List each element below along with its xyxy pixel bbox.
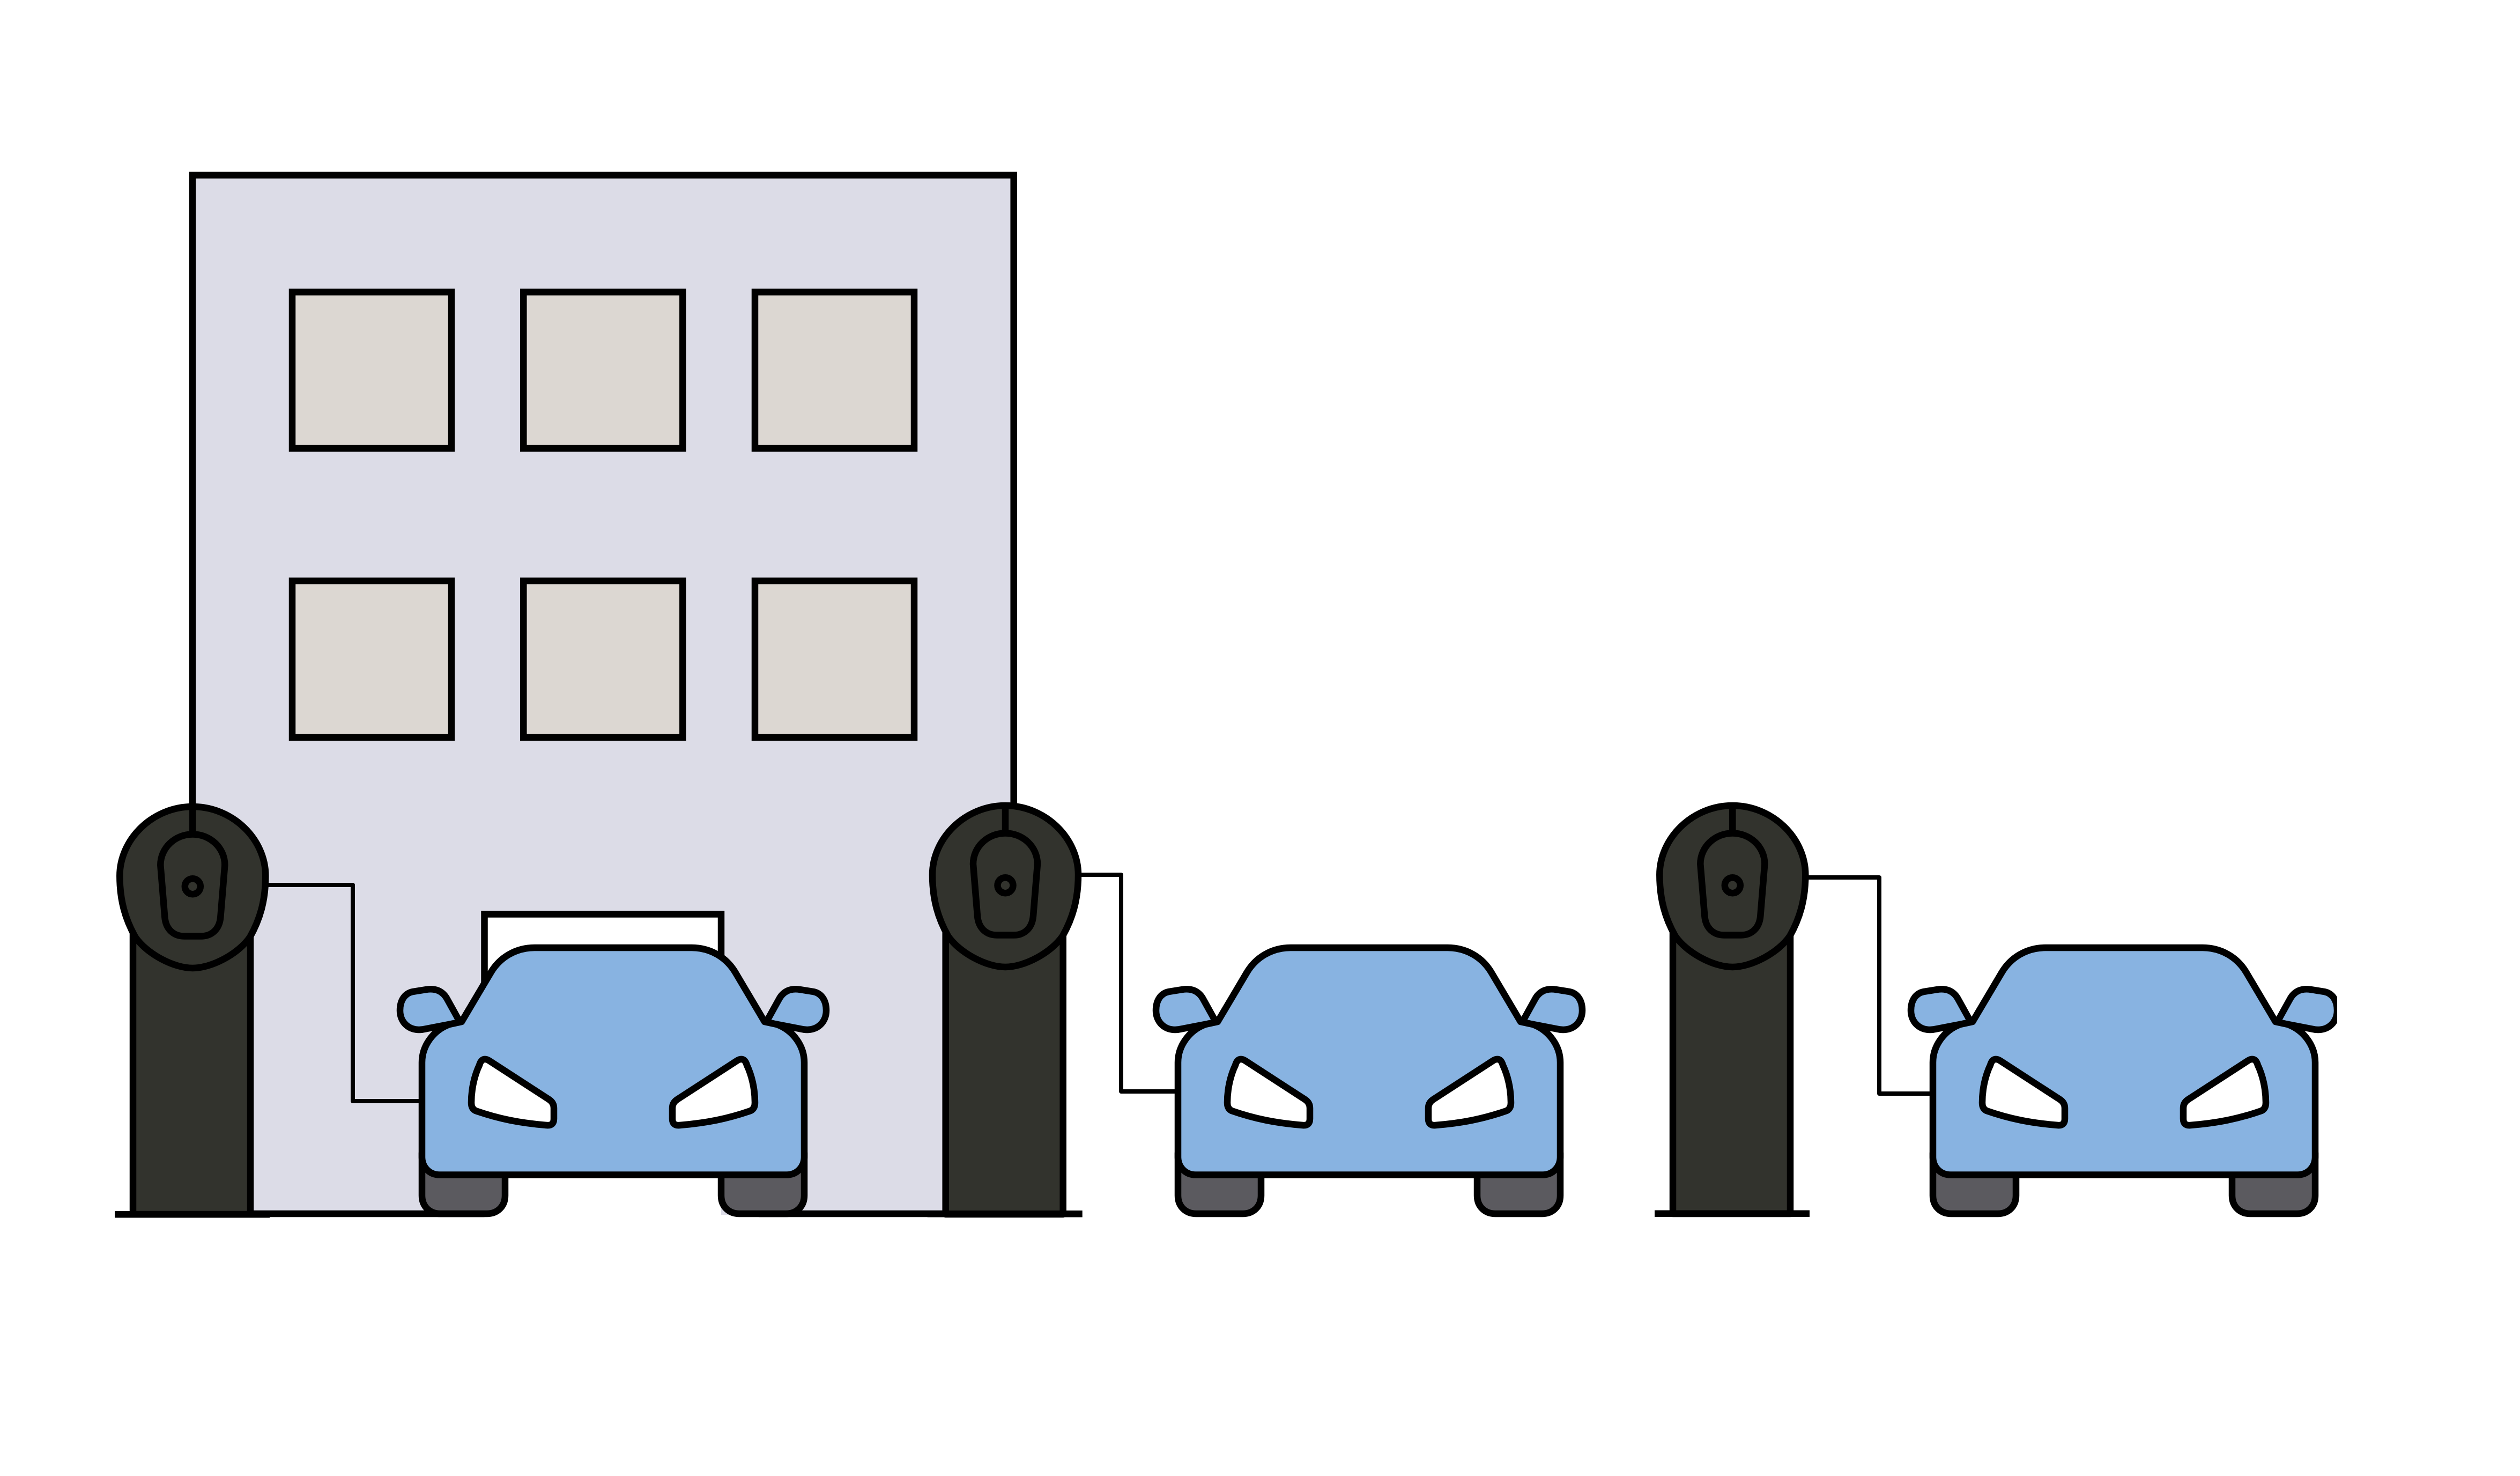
window: top left (292, 292, 451, 448)
building (192, 175, 1014, 1221)
charger 2 (928, 806, 1083, 1217)
car 3 (1911, 948, 2337, 1214)
car 2 left headlight (1227, 1059, 1310, 1125)
building door (485, 914, 759, 1221)
window: bottom middle (523, 581, 683, 737)
car 3 right headlight (2183, 1059, 2266, 1125)
car 1 right mirror (766, 989, 826, 1030)
windows (292, 292, 914, 737)
window: top right (755, 292, 914, 448)
charger 2 head (932, 806, 1078, 967)
charger 1 (115, 807, 270, 1217)
charging cable 2 (1079, 875, 1180, 1091)
car 1 body (422, 948, 804, 1175)
car 3 right wheel (2232, 1153, 2315, 1214)
charger 1 head (120, 807, 265, 968)
car 3 left mirror (1911, 989, 1971, 1030)
car 2 body (1178, 948, 1560, 1175)
charger 1 post (133, 932, 250, 1214)
charger 3 stem (1729, 806, 1736, 833)
window: top middle (523, 292, 683, 448)
charger 1 stem (189, 807, 196, 835)
car 2 left wheel (1178, 1153, 1261, 1214)
building wall (192, 175, 1014, 1214)
car 1 (400, 948, 826, 1214)
car 1 left wheel (422, 1153, 505, 1214)
car 1 right wheel (721, 1153, 804, 1214)
charger 1 base (115, 1211, 270, 1217)
charger 3 post (1673, 932, 1790, 1214)
illustration: EV charging scene (115, 172, 2337, 1217)
window: bottom left (292, 581, 451, 737)
charger 1 socket (185, 879, 201, 894)
charger 2 post (946, 932, 1063, 1214)
car 1 left mirror (400, 989, 460, 1030)
window: bottom right (755, 581, 914, 737)
car 3 left headlight (1982, 1059, 2065, 1125)
charger 2 stem (1002, 806, 1009, 833)
charging cable 1 (266, 885, 424, 1101)
charger 1 socket panel (160, 835, 225, 936)
car 2 right wheel (1477, 1153, 1560, 1214)
car 2 right mirror (1522, 989, 1582, 1030)
charger 3 (1655, 806, 1810, 1217)
charging cable 3 (1806, 877, 1935, 1094)
charger 3 head (1659, 806, 1805, 967)
car 3 left wheel (1933, 1153, 2016, 1214)
car 3 right mirror (2277, 989, 2337, 1030)
car 2 right headlight (1428, 1059, 1511, 1125)
car 1 left headlight (471, 1059, 554, 1125)
car 2 (1156, 948, 1582, 1214)
charger 3 base (1655, 1210, 1810, 1217)
car 2 left mirror (1156, 989, 1216, 1030)
charger 2 socket panel (973, 833, 1037, 935)
charger 3 socket (1725, 877, 1740, 893)
car 3 body (1933, 948, 2315, 1175)
car 1 right headlight (672, 1059, 755, 1125)
charger 3 socket panel (1700, 833, 1765, 935)
charger 2 base (928, 1211, 1083, 1217)
charger 2 socket (997, 877, 1013, 893)
